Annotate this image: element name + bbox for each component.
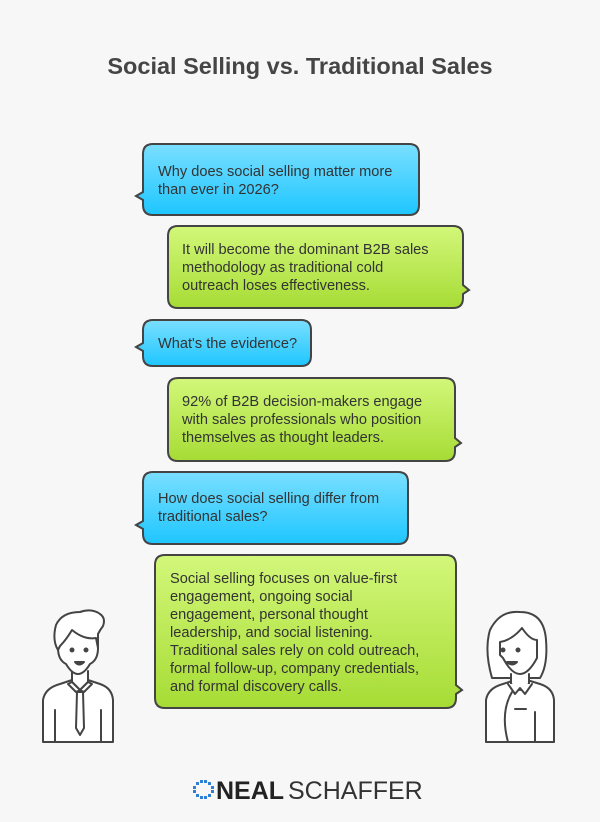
bubble: answer 3: Social selling focuses on value-first [170, 571, 397, 587]
bubble: answer 3: Traditional sales rely on cold outreach, [170, 643, 419, 659]
bubble: answer 2: themselves as thought leaders. [182, 430, 384, 446]
logo: NEAL [216, 777, 284, 805]
bubble: answer 3: engagement, ongoing social [170, 589, 353, 605]
icon: man [43, 610, 113, 742]
logo [193, 777, 423, 805]
bubble: answer 3: leadership, and social listening. [170, 625, 373, 641]
bubble: answer 1: It will become the dominant B2B sales [182, 242, 429, 258]
logo: SCHAFFER [288, 777, 423, 805]
bubble: answer 3: engagement, personal thought [170, 607, 368, 623]
bubble: question 2: What's the evidence? [158, 336, 297, 352]
bubble: question 3: How does social selling differ from [158, 491, 379, 507]
bubble: question 1: than ever in 2026? [158, 182, 279, 198]
bubble: question 3: traditional sales? [158, 509, 268, 525]
bubble: question 1: Why does social selling matter more [158, 164, 392, 180]
bubble: answer 1: outreach loses effectiveness. [182, 278, 370, 294]
bubble: question 3 [136, 472, 408, 544]
bubble: answer 2 [168, 378, 461, 461]
bubble: answer 3: and formal discovery calls. [170, 679, 342, 695]
bubble: answer 3: formal follow-up, company credentials, [170, 661, 419, 677]
icon: woman [486, 612, 554, 742]
bubble: answer 1 [168, 226, 469, 308]
title: Social Selling vs. Traditional Sales [107, 53, 493, 79]
bubble: answer 2: 92% of B2B decision-makers engage [182, 394, 422, 410]
bubble: question 2 [136, 320, 311, 366]
bubble: question 1 [136, 144, 419, 215]
bubble: answer 1: methodology as traditional cold [182, 260, 383, 276]
bubble: answer 3 [155, 555, 462, 708]
bubble: answer 2: with sales professionals who position [181, 412, 421, 428]
